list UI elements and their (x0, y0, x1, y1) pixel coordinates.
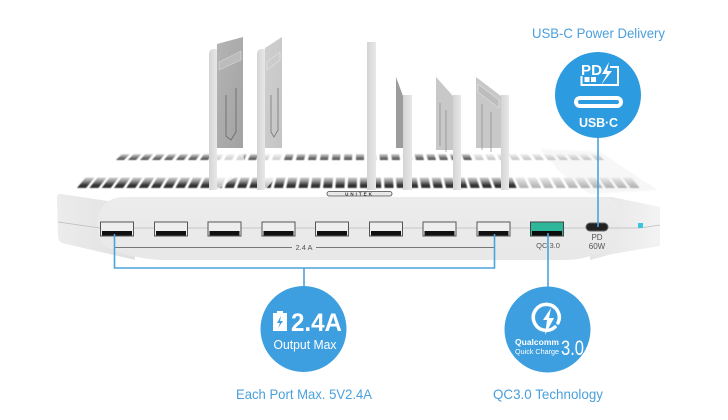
top surface (60, 150, 664, 200)
value: 2.4A (291, 309, 342, 337)
usb port 5 (316, 222, 348, 236)
logo badge (327, 192, 392, 196)
divider 6 (476, 77, 509, 190)
qc port (530, 222, 564, 236)
usb-c port (586, 223, 608, 231)
icon: usb-c plug (576, 98, 621, 106)
callout: 2.4A (260, 286, 346, 372)
right wing (590, 197, 660, 260)
left wing (57, 194, 135, 260)
port bracket 2.4 A: 2.4 A (295, 243, 313, 252)
caption: qc3.0: QC3.0 Technology (493, 386, 603, 402)
usb port 1 (100, 222, 134, 236)
usb-c label: USB·C (579, 116, 618, 130)
front panel (97, 197, 622, 260)
front row of slots, right side fading (515, 178, 640, 188)
divider 5 (436, 77, 461, 190)
pd label: PD (591, 233, 603, 242)
caption: each port: Each Port Max. 5V2.4A (236, 386, 373, 402)
back row of slots (116, 154, 472, 160)
usb port 4 (262, 222, 295, 236)
heading: usb-c power delivery: USB-C Power Delivery (532, 25, 665, 41)
divider 4 (396, 77, 412, 190)
quick charge brand: Quick Charge (515, 347, 559, 356)
icon: pd battery: PD (581, 62, 602, 79)
qualcomm brand: Qualcomm (515, 338, 559, 347)
status led (638, 223, 643, 228)
icon: quick charge ring (533, 304, 559, 335)
qc label: QC 3.0 (536, 241, 560, 250)
usb port 8 (477, 222, 510, 236)
usb port 6 (370, 222, 402, 236)
icon: battery bolt (273, 311, 287, 331)
usb port 3 (208, 222, 241, 236)
output max label: Output Max (274, 337, 337, 352)
divider 1 (209, 37, 245, 190)
front row of slots (77, 178, 517, 188)
version: 3.0 (561, 337, 584, 360)
back row of slots, right side fading (473, 154, 604, 160)
divider 3 (367, 42, 376, 190)
logo badge: UNITEK (345, 192, 374, 196)
divider 2 (257, 37, 284, 190)
charging station device (57, 37, 664, 260)
watt label: 60W (589, 242, 606, 251)
connector lines (114, 136, 598, 288)
pale right surface shading (540, 149, 658, 194)
callout: qualcomm (504, 286, 590, 372)
callout: usb-c (555, 52, 641, 138)
usb port 7 (423, 222, 456, 236)
usb port 2 (154, 222, 188, 236)
